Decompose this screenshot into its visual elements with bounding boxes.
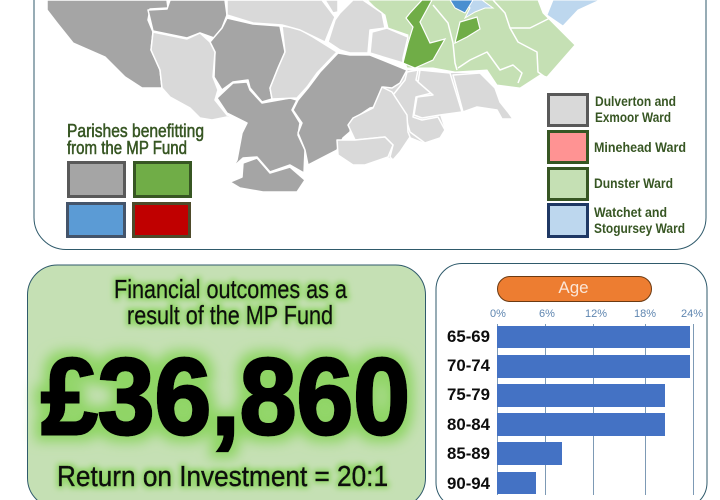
map: light grey coastline base <box>337 70 513 165</box>
chart category labels: 75-79 <box>447 385 490 404</box>
chart category labels: 65-69 <box>447 327 490 346</box>
chart category labels: 90-94 <box>447 474 491 493</box>
chart axis labels <box>490 308 703 320</box>
legend: wards: Dulverton and <box>595 93 676 109</box>
heading pill: Age: Age <box>558 278 589 297</box>
legend: parish colour swatches <box>68 162 190 236</box>
heading: parishes legend: Parishes benefitting <box>67 121 204 141</box>
map: Watchet and Stogursey ward area <box>462 0 600 26</box>
map: dark grey funded parishes <box>47 0 407 192</box>
bar chart: age groups <box>497 326 690 494</box>
chart category labels: 85-89 <box>447 444 490 463</box>
map: Dunster ward area <box>365 0 575 88</box>
legend: wards: Watchet and <box>594 204 667 220</box>
heading pill: Age <box>498 276 652 302</box>
legend: wards: Stogursey Ward <box>594 220 685 236</box>
heading: parishes legend: from the MP Fund <box>67 138 187 158</box>
heading: financial outcomes <box>114 274 347 330</box>
panel: parish map <box>34 0 706 250</box>
map: light grey Dulverton and Exmoor parishes <box>151 0 513 165</box>
chart axis labels: 0% <box>490 308 506 320</box>
chart axis labels: 18% <box>634 308 656 320</box>
big number: financial value: £36,860 <box>41 336 410 458</box>
chart category labels: 80-84 <box>447 415 491 434</box>
legend: wards: Exmoor Ward <box>595 109 671 125</box>
chart axis labels: 24% <box>681 308 703 320</box>
chart category labels: 70-74 <box>447 356 491 375</box>
legend: wards <box>548 93 686 236</box>
map: blue funded parish <box>450 0 473 13</box>
chart axis labels: 6% <box>539 308 555 320</box>
text: return on investment: Return on Investment = 20:1 <box>57 461 388 493</box>
heading: financial outcomes: result of the MP Fund <box>127 300 333 330</box>
heading: parishes legend <box>67 121 204 158</box>
map: parishes by ward <box>47 0 600 192</box>
panel: financial outcomes <box>28 265 426 500</box>
legend: wards: Dunster Ward <box>594 175 673 191</box>
chart category labels <box>447 327 491 493</box>
map: green funded parishes <box>403 0 480 68</box>
heading: financial outcomes: Financial outcomes as a <box>114 274 347 304</box>
panel: age chart <box>436 264 707 500</box>
chart axis labels: 12% <box>585 308 607 320</box>
legend: wards: Minehead Ward <box>594 139 686 155</box>
